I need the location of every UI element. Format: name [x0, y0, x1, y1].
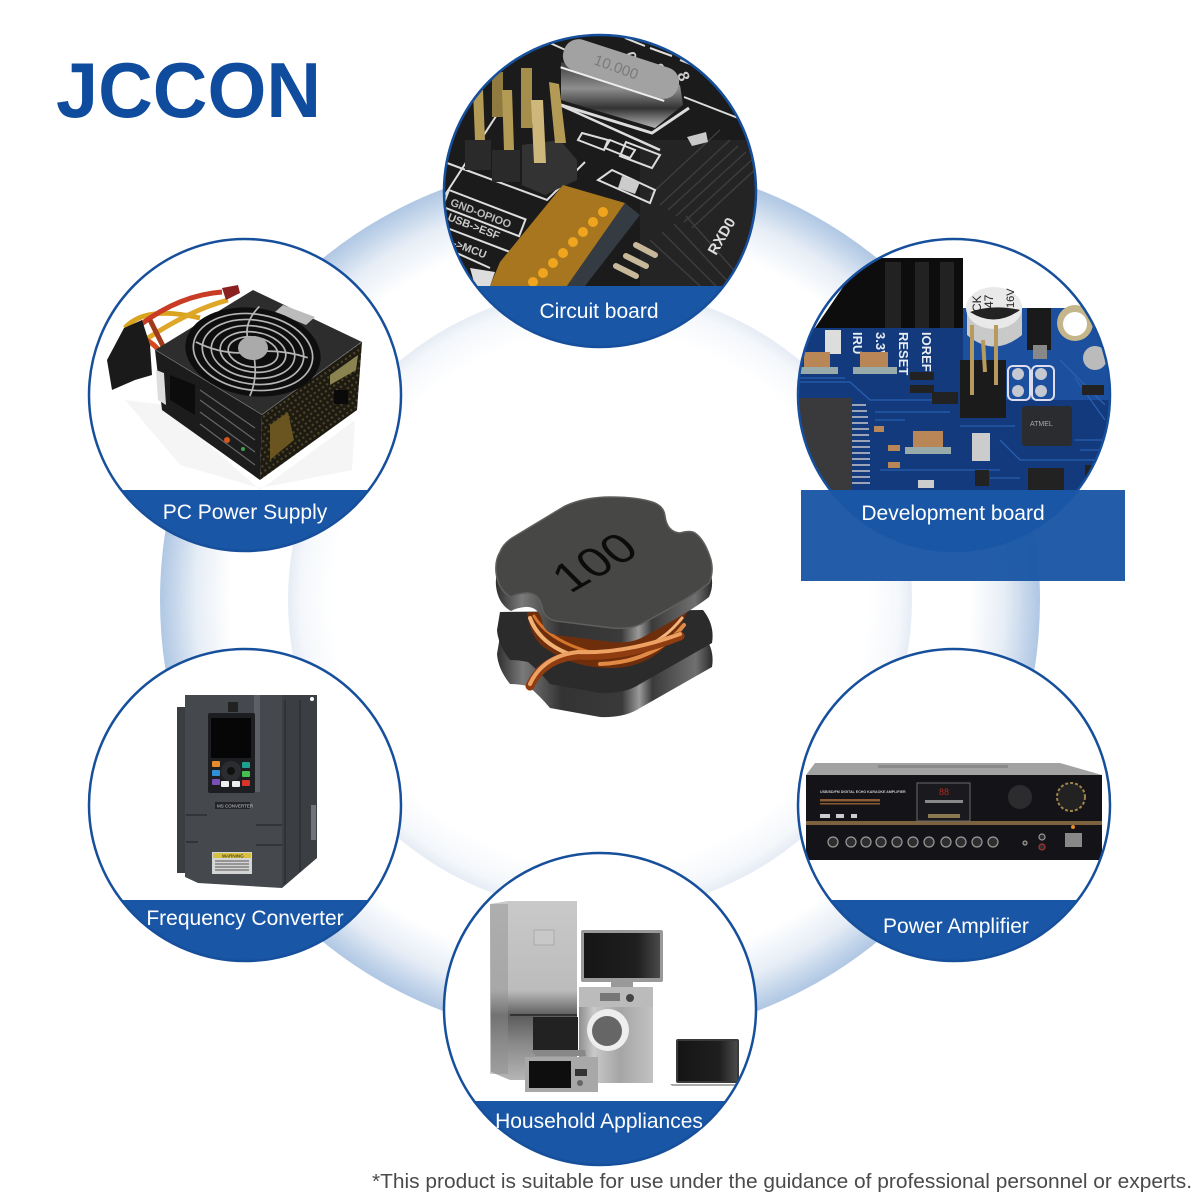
silkscreen lines [445, 38, 738, 200]
electrolytic capacitor [967, 305, 1022, 346]
panel text [820, 790, 906, 818]
keypad buttons [212, 761, 250, 787]
silkscreen labels: GND-OPIOO [449, 197, 513, 231]
QFN chip [1022, 406, 1072, 446]
photo: audio amplifier [806, 763, 1102, 860]
silkscreen digits: 0 [620, 50, 639, 64]
gold header pins [465, 140, 577, 195]
top face [155, 290, 362, 415]
photo: dark circuit board: ->MCU [451, 238, 488, 261]
label: Household Appliances [495, 1110, 703, 1133]
grey switch strip [567, 203, 640, 286]
lower plate of inductor [497, 610, 713, 717]
photo: frequency inverter [177, 695, 317, 888]
model strip and warning label [215, 802, 250, 809]
panel: Development board [790, 239, 1125, 581]
sticker [275, 305, 315, 325]
photo: blue development board: 47 [982, 294, 996, 308]
smd parts [578, 133, 660, 203]
washing machine [579, 987, 653, 1083]
fan [186, 307, 320, 397]
cables [123, 290, 229, 350]
display [917, 783, 970, 821]
marking 100: 100 [541, 524, 649, 602]
photo: dark circuit board [440, 30, 760, 290]
panel: PC Power Supply [80, 239, 410, 560]
pin labels: RESET [896, 332, 911, 375]
copper winding [527, 612, 687, 686]
diode [1027, 308, 1051, 350]
large IC [796, 398, 852, 493]
pin labels [850, 332, 934, 375]
fridge [490, 901, 577, 1080]
black pin header [960, 360, 1006, 418]
footnote disclaimer: *This product is suitable for use under the guidance of professional personnel or experts. [372, 1170, 1192, 1193]
photo: blue development board: ATMEL [1030, 421, 1053, 428]
copper traces [800, 360, 1105, 478]
right face with mesh [260, 342, 362, 480]
label: Development board [861, 502, 1045, 525]
small knob row [828, 834, 1045, 850]
panel: Circuit board [440, 30, 760, 356]
photo: dark circuit board: USB->ESF [446, 212, 502, 243]
black header socket [815, 258, 963, 328]
photo: audio amplifier: 88 [939, 787, 949, 797]
label: Power Amplifier [883, 915, 1029, 938]
upper plate of inductor [496, 497, 712, 642]
laptop right [676, 1039, 739, 1083]
silkscreen digits: 9 [648, 62, 667, 76]
volume knobs [1008, 785, 1032, 809]
silkscreen digits [626, 52, 690, 82]
silkscreen digits: 8 [673, 70, 692, 84]
microwave [525, 1057, 598, 1092]
left face [155, 350, 262, 480]
panel text: USB/SD/FM DIGITAL ECHO KARAOKE AMPLIFIER [820, 790, 906, 794]
panel: Household Appliances [440, 853, 760, 1171]
gold mounting hole [1057, 305, 1093, 341]
panel: Frequency Converter [80, 649, 410, 970]
pin labels: IRU [850, 332, 865, 354]
label: Circuit board [539, 300, 659, 323]
tv [581, 930, 663, 982]
panel: Power Amplifier [790, 649, 1120, 970]
front panel detail [170, 375, 195, 415]
keypad panel [208, 713, 255, 793]
title: JCCON brand: JCCON [56, 46, 321, 134]
solder legs [616, 245, 655, 276]
photo: blue development board: CK [970, 295, 984, 312]
tantalum caps [804, 352, 943, 451]
photo: blue development board: 16V [1005, 288, 1017, 308]
pin labels: 3.3V [873, 332, 888, 359]
photo: frequency inverter: WARNING [222, 854, 244, 858]
photo: blue development board [790, 258, 1120, 498]
central product: inductor coil [496, 497, 713, 717]
crystal oscillator [561, 62, 683, 128]
small laptop [533, 1017, 578, 1050]
small components [910, 372, 1105, 490]
photo: power supply unit [107, 285, 362, 490]
RXD0 label: RXD0 [705, 215, 739, 258]
background rings [160, 160, 1040, 1040]
photo: home appliances [490, 901, 740, 1092]
pin labels: IOREF [919, 332, 934, 372]
label: Frequency Converter [146, 907, 344, 930]
photo: dark circuit board: 10.000 [592, 52, 641, 83]
label: PC Power Supply [163, 501, 328, 524]
label band [801, 490, 1125, 581]
amber DIP switch [490, 185, 625, 286]
solder pads [1012, 368, 1047, 397]
photo: frequency inverter: MS CONVERTER [217, 804, 254, 808]
silkscreen labels [443, 190, 526, 236]
